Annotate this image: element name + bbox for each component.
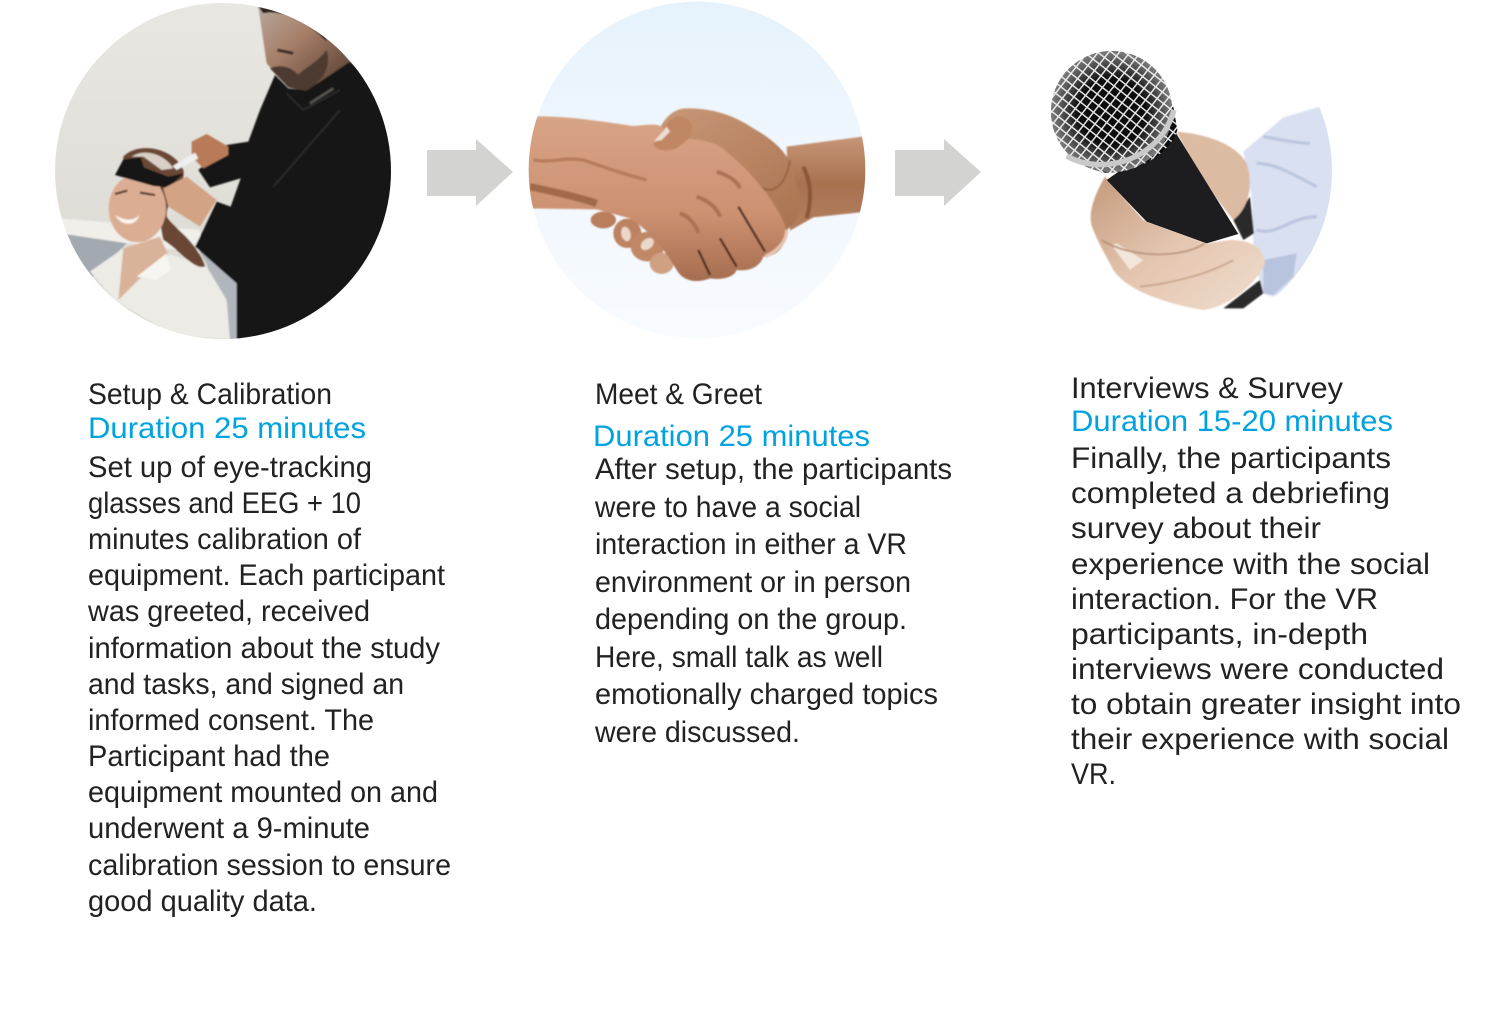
description text: were discussed. xyxy=(594,716,800,749)
description text: Here, small talk as well xyxy=(595,641,883,674)
right arm xyxy=(787,136,867,231)
back hand xyxy=(653,108,800,230)
syringe xyxy=(173,153,198,170)
hands xyxy=(192,134,228,168)
arrow: setup to meet and greet xyxy=(427,139,513,206)
description text: Set up of eye-tracking xyxy=(88,451,372,484)
left arm and hand xyxy=(527,116,787,281)
panel: setup and calibration xyxy=(53,0,451,918)
description text: emotionally charged topics xyxy=(595,678,938,711)
description text: was greeted, received xyxy=(87,595,370,628)
description text: glasses and EEG + 10 xyxy=(88,487,361,520)
description text: interaction in either a VR xyxy=(595,528,907,561)
panel: interviews and survey xyxy=(1050,50,1461,791)
duration: Duration 15-20 minutes xyxy=(1071,405,1393,438)
description text: good quality data. xyxy=(88,885,317,918)
woman shirt xyxy=(90,248,230,340)
description text xyxy=(1071,442,1461,791)
man jacket xyxy=(195,62,393,343)
description text: experience with the social xyxy=(1071,548,1430,581)
cuff xyxy=(1233,197,1254,240)
panel: meet and greet xyxy=(527,0,952,749)
description text: participants, in-depth xyxy=(1071,618,1368,651)
description text: were to have a social xyxy=(594,491,861,524)
description text: their experience with social xyxy=(1071,723,1449,756)
headband xyxy=(115,157,184,187)
step title: Interviews & Survey xyxy=(1071,372,1343,405)
man head xyxy=(258,7,352,92)
description text: survey about their xyxy=(1071,512,1321,545)
description text: interviews were conducted xyxy=(1071,653,1444,686)
description text: information about the study xyxy=(88,632,440,665)
sleeve xyxy=(1243,107,1340,297)
description text xyxy=(87,451,451,918)
mic grille xyxy=(1050,50,1173,173)
palm and thumb xyxy=(1091,177,1265,310)
duration: Duration 25 minutes xyxy=(88,412,366,445)
step title: Setup & Calibration xyxy=(88,378,332,411)
plastic cap on hair xyxy=(132,153,173,170)
description text xyxy=(594,453,952,749)
thumb xyxy=(653,117,692,150)
description text: to obtain greater insight into xyxy=(1071,688,1461,721)
description text: Participant had the xyxy=(88,740,330,773)
description text: environment or in person xyxy=(595,566,911,599)
back fingers xyxy=(1177,132,1250,220)
description text: completed a debriefing xyxy=(1071,477,1390,510)
step title: Meet & Greet xyxy=(595,378,763,411)
description text: interaction. For the VR xyxy=(1071,583,1378,616)
description text: equipment mounted on and xyxy=(88,776,438,809)
photo: handshake xyxy=(527,0,870,340)
gripping fingers behind xyxy=(591,212,616,228)
description text: After setup, the participants xyxy=(595,453,952,486)
description text: minutes calibration of xyxy=(88,523,362,556)
arrow: meet and greet to interviews xyxy=(895,139,981,206)
mic body xyxy=(1107,132,1238,243)
photo: hand holding microphone xyxy=(1050,50,1340,310)
woman hair xyxy=(123,148,205,267)
mic lower grille band xyxy=(1067,107,1177,173)
description text: calibration session to ensure xyxy=(88,849,451,882)
description text: informed consent. The xyxy=(88,704,374,737)
description text: equipment. Each participant xyxy=(88,559,446,592)
description text: Finally, the participants xyxy=(1071,442,1391,475)
description text: VR. xyxy=(1071,758,1116,791)
description text: depending on the group. xyxy=(595,603,907,636)
description text: and tasks, and signed an xyxy=(88,668,404,701)
photo: researcher fitting EEG headset on participant xyxy=(53,0,393,343)
description text: underwent a 9-minute xyxy=(88,812,370,845)
duration: Duration 25 minutes xyxy=(593,420,870,453)
woman face xyxy=(109,174,166,242)
